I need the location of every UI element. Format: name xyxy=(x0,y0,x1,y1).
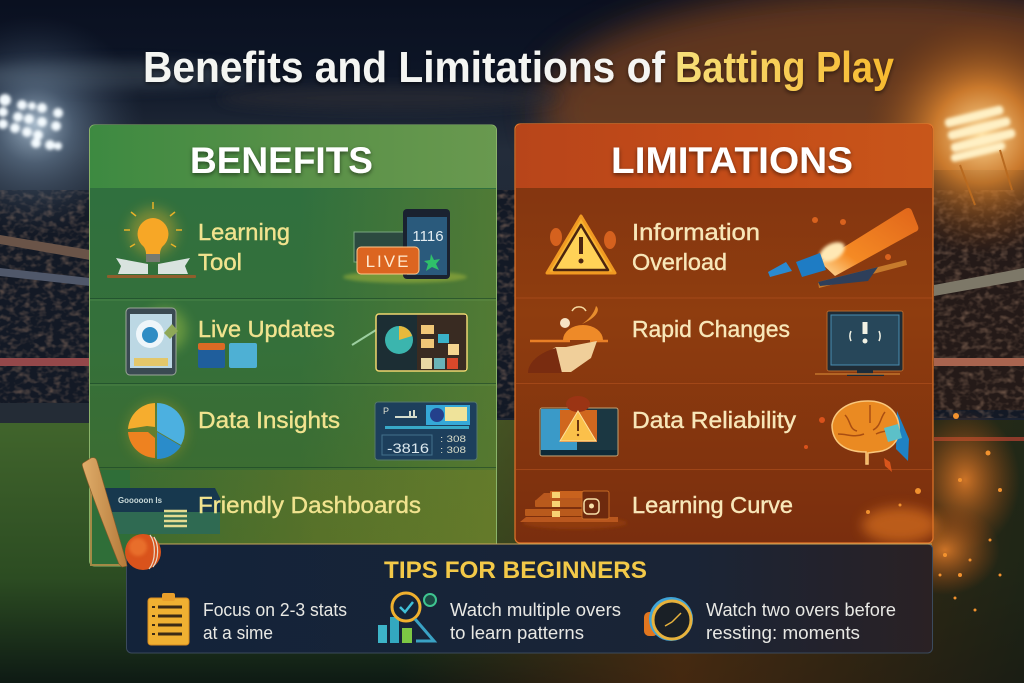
icon: clipboard xyxy=(148,593,189,645)
tips heading: TIPS FOR BEGINNERS xyxy=(384,557,647,584)
panel: limitations xyxy=(515,124,938,543)
icon: phone with live badge: LIVE xyxy=(366,252,410,271)
panel: tips for beginners xyxy=(126,544,932,653)
icon: scoreboard: : 308 xyxy=(440,434,466,444)
text: learning curve: Learning Curve xyxy=(632,492,793,518)
icon: warning triangle xyxy=(547,216,616,273)
limitations header: LIMITATIONS xyxy=(611,140,853,181)
icon: info cards xyxy=(198,343,257,368)
right floodlight xyxy=(862,15,1024,255)
icon: scoreboard: P xyxy=(383,406,389,416)
text: focus tip xyxy=(203,600,347,643)
icon: small dashboard card xyxy=(105,488,220,534)
icon: stopwatch xyxy=(644,597,693,641)
text: live updates: Live Updates xyxy=(198,316,335,342)
icon: phone with live badge xyxy=(343,209,467,283)
text: watch overs tip: Watch multiple overs xyxy=(450,600,621,620)
icon: cricket ball xyxy=(125,534,161,570)
sparks: limitations corner xyxy=(862,488,938,543)
icon: phone with live badge: 1116 xyxy=(412,228,444,245)
text: data insights: Data Insights xyxy=(198,407,340,433)
text: information overload xyxy=(632,219,760,275)
text: watch overs tip xyxy=(450,600,621,643)
text: learning tool: Learning xyxy=(198,219,290,245)
icon: chart with magnifier xyxy=(378,593,436,643)
text: focus tip: Focus on 2-3 stats xyxy=(203,600,347,620)
icon: tablet xyxy=(126,308,187,375)
panel: benefits xyxy=(90,125,496,566)
text: data reliability: Data Reliability xyxy=(632,407,797,433)
icon: scoreboard: : 308 xyxy=(440,445,466,455)
text: watch two overs tip: ressting: moments xyxy=(706,623,860,643)
icon: brain xyxy=(804,401,909,472)
text: watch overs tip: to learn patterns xyxy=(450,623,584,643)
limitations header xyxy=(516,124,932,188)
text: learning tool xyxy=(198,219,290,275)
text: watch two overs tip: Watch two overs before xyxy=(706,600,896,620)
icon: alert monitor xyxy=(815,311,903,376)
text: focus tip: at a sime xyxy=(203,623,273,643)
icon: small dashboard card: Gooooon Is xyxy=(118,496,163,505)
icon: hand with dial xyxy=(528,306,608,373)
sparks: right field xyxy=(890,410,1020,612)
left floodlight xyxy=(0,15,145,235)
benefits header xyxy=(90,125,496,188)
text: rapid changes: Rapid Changes xyxy=(632,316,790,342)
icon: light bulb on book xyxy=(107,202,196,278)
icon: pie chart xyxy=(127,401,187,461)
icon: dashboard xyxy=(352,314,467,371)
icon: stacked curve xyxy=(520,491,627,529)
icon: laptop warning xyxy=(540,396,618,456)
icon: cricket bat xyxy=(82,458,127,567)
icon: glowing bat xyxy=(768,208,918,288)
icon: scoreboard xyxy=(375,402,477,460)
benefits header: BENEFITS xyxy=(190,140,373,181)
title: Benefits and Limitations of xyxy=(143,43,665,92)
text: friendly dashboards: Friendly Dashboards xyxy=(198,492,421,518)
icon: scoreboard: -3816 xyxy=(387,440,429,456)
title: Batting Play xyxy=(675,43,894,92)
text: information overload: Overload xyxy=(632,249,727,275)
text: learning tool: Tool xyxy=(198,249,242,275)
text: information overload: Information xyxy=(632,219,760,245)
text: watch two overs tip xyxy=(706,600,896,643)
